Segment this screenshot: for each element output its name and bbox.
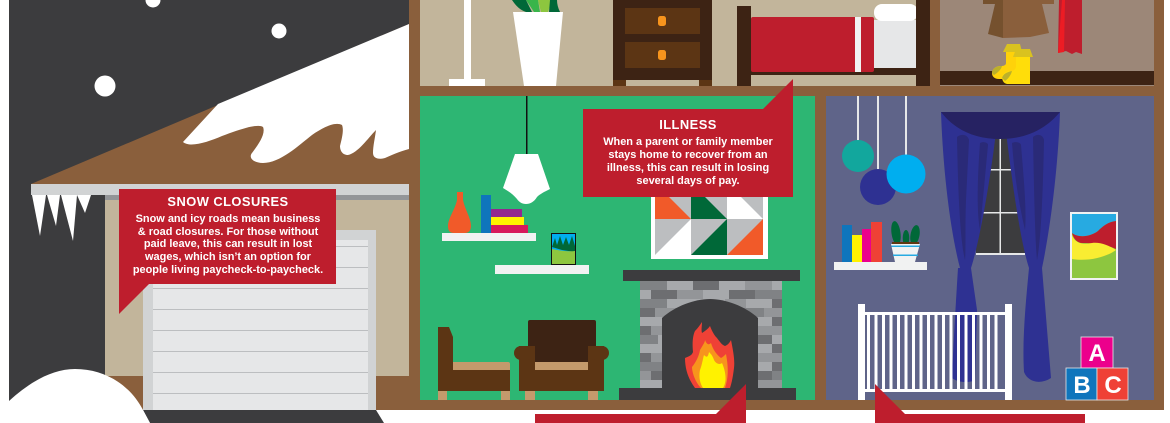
floor lamp [449, 0, 485, 86]
callout: snow closures: paid leave, this can result in lost [144, 238, 313, 250]
bed [737, 0, 930, 86]
callout: snow closures: people living paycheck-to-paycheck. [133, 264, 323, 276]
panel: living room [420, 79, 815, 400]
boots [992, 44, 1033, 84]
armchair [514, 320, 609, 400]
icicles [32, 195, 91, 241]
crib [858, 304, 1012, 400]
callout: illness: ILLNESS [659, 117, 717, 132]
panel: nursery [826, 96, 1154, 400]
callout: snow closures: SNOW CLOSURES [167, 194, 289, 209]
callout stub: right bottom [875, 384, 1085, 423]
nightstand [613, 0, 712, 86]
callout: snow closures: Snow and icy roads mean business [136, 213, 320, 225]
mantel [623, 270, 800, 281]
nursery shelf with books and plant [834, 220, 927, 270]
callout: snow closures: & road closures. For those without [138, 226, 319, 238]
callout: illness: stays home to recover from an [608, 149, 768, 161]
shelf with vase and books [442, 192, 536, 241]
closet shelf [940, 71, 1154, 85]
flames [685, 322, 734, 388]
plant in vase [512, 0, 563, 86]
callout: snow closures: wages, which isn’t an option for [144, 251, 312, 263]
curtains [941, 112, 1060, 382]
firebox [662, 299, 758, 388]
snow mound [9, 369, 150, 423]
hanging mobile [842, 96, 926, 205]
callout: illness: several days of pay. [636, 175, 740, 187]
callout: snow closures [119, 189, 336, 314]
callout stub: left bottom [535, 384, 746, 423]
alphabet blocks: A [1088, 340, 1106, 367]
callout: illness [583, 79, 793, 197]
pendant lamp [503, 96, 550, 204]
hearth [619, 388, 796, 400]
chimney bricks [640, 281, 782, 388]
chaise [438, 327, 510, 400]
panel: garage exterior [9, 24, 409, 423]
snowflakes [94, 0, 286, 96]
fireplace [619, 270, 800, 400]
roof [31, 24, 409, 184]
panel: night sky [9, 0, 410, 410]
garage door [143, 230, 376, 410]
poster [1070, 212, 1118, 280]
driveway [143, 410, 384, 423]
callout: illness: illness, this can result in losing [607, 162, 769, 174]
scarf [1058, 0, 1082, 54]
callout: illness: When a parent or family member [603, 136, 774, 148]
alphabet blocks: C [1104, 372, 1122, 399]
coat [983, 0, 1054, 38]
panel: closet [940, 0, 1154, 86]
wall base [105, 376, 409, 410]
eave [31, 184, 409, 195]
eave shadow [105, 195, 409, 200]
panel: upstairs bedroom [420, 0, 930, 86]
shelf with picture [495, 233, 589, 274]
window [976, 135, 1025, 255]
alphabet blocks [1066, 337, 1128, 400]
house frame [409, 0, 1164, 410]
alphabet blocks: B [1073, 372, 1091, 399]
wall [105, 200, 409, 376]
roof snow [183, 24, 409, 163]
framed art [651, 183, 768, 259]
